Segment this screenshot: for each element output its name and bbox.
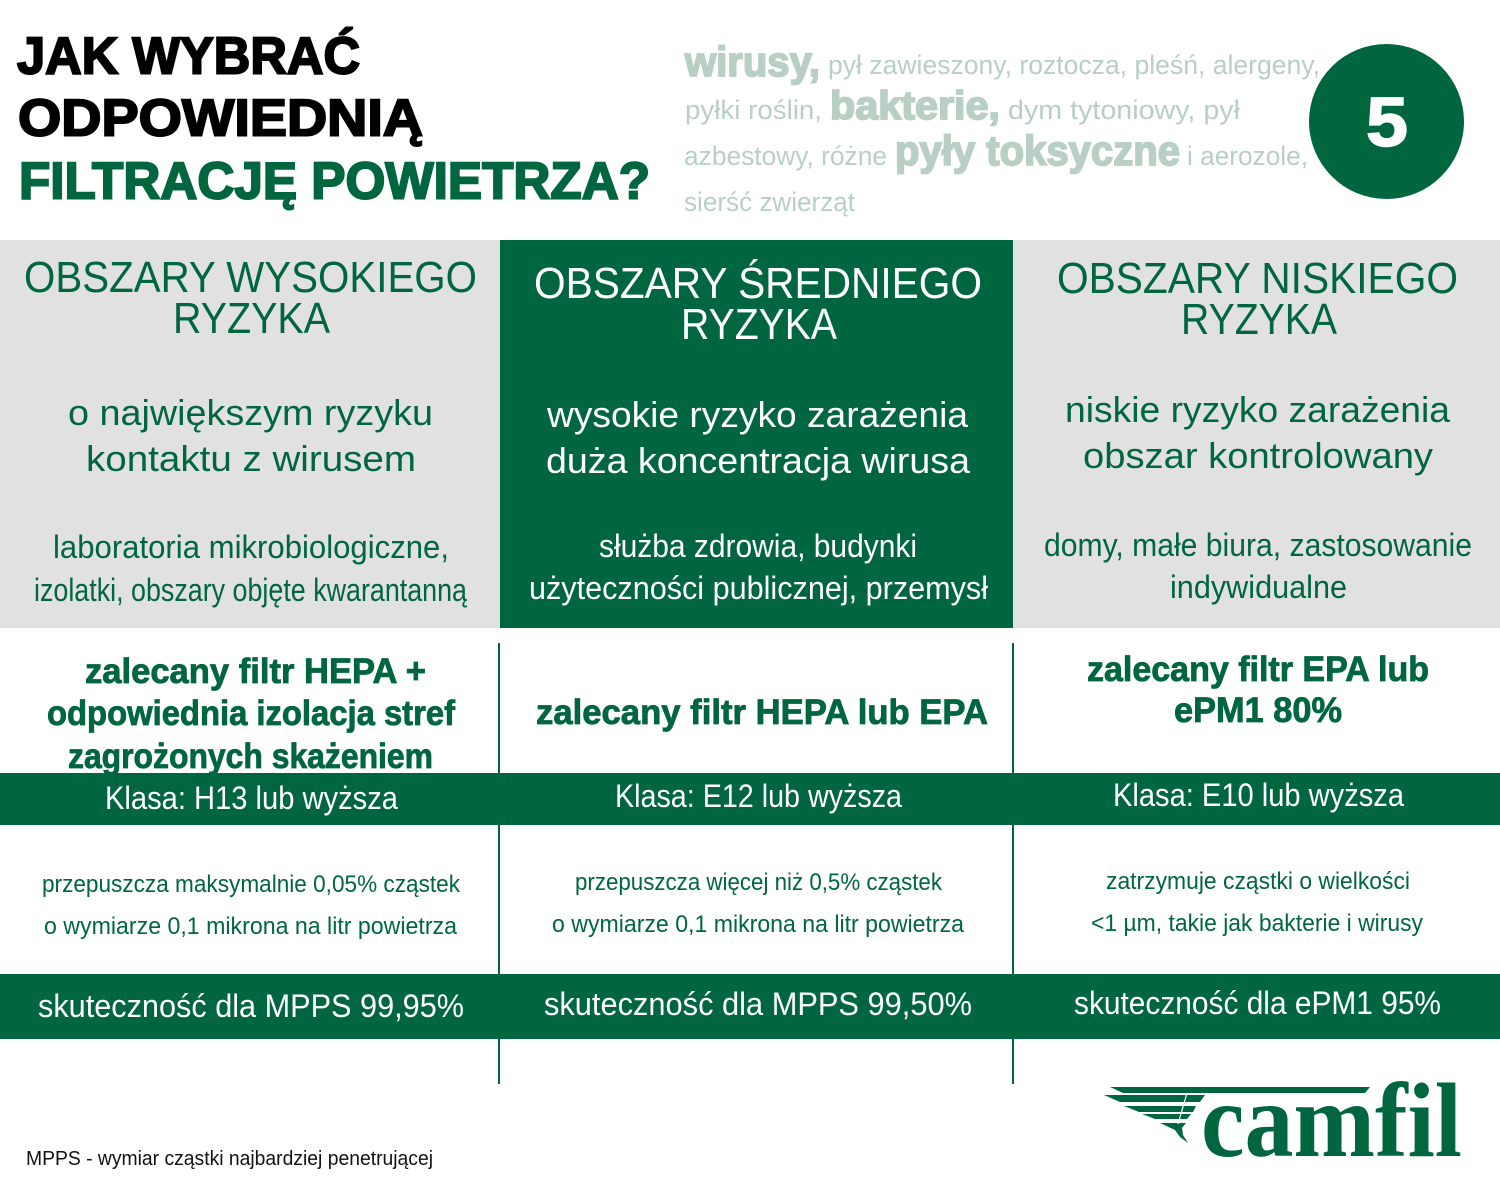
panel: medium risk column: OBSZARY ŚREDNIEGO: [534, 257, 982, 308]
word cloud of pollutants: wirusy,: [684, 38, 820, 85]
number badge 5: 5: [1366, 83, 1408, 161]
panel: medium risk column: służba zdrowia, budynki: [599, 528, 917, 564]
word cloud of pollutants: sierść zwierząt: [684, 187, 855, 217]
panel: medium risk column: RYZYKA: [681, 300, 838, 349]
panel: low risk column: indywidualne: [1170, 569, 1347, 605]
panel: low risk column: Klasa: E10 lub wyższa: [1113, 777, 1404, 813]
word cloud of pollutants: i aerozole,: [1187, 141, 1308, 171]
word cloud of pollutants: [684, 38, 1320, 217]
panel: high risk column: kontaktu z wirusem: [86, 438, 416, 479]
panel: high risk column: przepuszcza maksymalnie 0,05% cząstek: [42, 871, 461, 898]
panel: high risk column: zagrożonych skażeniem: [68, 737, 433, 776]
panel: column backgrounds: [0, 240, 1500, 628]
panel: high risk column: o wymiarze 0,1 mikrona na litr powietrza: [44, 913, 458, 940]
title: [17, 28, 650, 210]
panel: high risk column: [24, 253, 477, 1024]
panel: high risk column: RYZYKA: [173, 294, 331, 343]
word cloud of pollutants: pyłki roślin,: [685, 95, 822, 125]
word cloud of pollutants: pyły toksyczne: [895, 127, 1180, 174]
footnote: MPPS - wymiar cząstki najbardziej penetrującej: [26, 1148, 433, 1170]
title: JAK WYBRAĆ: [17, 28, 360, 86]
panel: medium risk column: [529, 257, 988, 1022]
panel: high risk column: izolatki, obszary objęte kwarantanną: [34, 572, 467, 608]
panel: medium risk column: Klasa: E12 lub wyższa: [615, 778, 902, 814]
panel: high risk column: odpowiednia izolacja stref: [47, 694, 455, 733]
word cloud of pollutants: azbestowy, różne: [684, 141, 887, 171]
panel: low risk column: niskie ryzyko zarażenia: [1065, 389, 1451, 430]
panel: high risk column: Klasa: H13 lub wyższa: [105, 780, 398, 816]
panel: high risk column: OBSZARY WYSOKIEGO: [24, 253, 477, 302]
panel: low risk column: skuteczność dla ePM1 95%: [1074, 985, 1441, 1021]
panel: low risk column: obszar kontrolowany: [1083, 435, 1433, 476]
panel: medium risk column: użyteczności publicznej, przemysł: [529, 570, 988, 606]
title: FILTRACJĘ POWIETRZA?: [19, 152, 650, 210]
word cloud of pollutants: bakterie,: [830, 84, 1000, 128]
panel: low risk column: [1044, 254, 1472, 1021]
band: efficiency: [0, 974, 1500, 1039]
panel: medium risk column: zalecany filtr HEPA lub EPA: [536, 693, 988, 732]
panel: low risk column: OBSZARY NISKIEGO: [1057, 254, 1458, 303]
panel: low risk column: ePM1 80%: [1174, 691, 1342, 730]
logo: camfil: camfil: [1201, 1062, 1462, 1179]
panel: high risk column: skuteczność dla MPPS 99,95%: [38, 988, 464, 1024]
panel: low risk column: zalecany filtr EPA lub: [1087, 650, 1429, 689]
panel: medium risk column: skuteczność dla MPPS 99,50%: [544, 986, 972, 1022]
word cloud of pollutants: pył zawieszony, roztocza, pleśń, alergeny,: [828, 50, 1320, 80]
panel: high risk column: o największym ryzyku: [68, 392, 433, 433]
word cloud of pollutants: dym tytoniowy, pył: [1008, 95, 1240, 125]
panel: low risk column: RYZYKA: [1181, 295, 1338, 344]
panel: medium risk column: o wymiarze 0,1 mikrona na litr powietrza: [552, 911, 965, 938]
band: filter class: [0, 773, 1500, 825]
panel: medium risk column: wysokie ryzyko zarażenia: [546, 394, 969, 435]
panel: low risk column: domy, małe biura, zastosowanie: [1044, 527, 1472, 563]
panel: high risk column: laboratoria mikrobiologiczne,: [53, 529, 449, 565]
number badge 5: [1309, 44, 1464, 199]
panel: low risk column: <1 µm, takie jak bakterie i wirusy: [1091, 910, 1423, 937]
logo: camfil: [1104, 1062, 1462, 1179]
panel: low risk column: zatrzymuje cząstki o wielkości: [1106, 868, 1410, 895]
title: ODPOWIEDNIĄ: [18, 90, 423, 148]
panel: medium risk column: przepuszcza więcej niż 0,5% cząstek: [575, 869, 943, 896]
panel: high risk column: zalecany filtr HEPA +: [85, 652, 426, 691]
panel: medium risk column: duża koncentracja wirusa: [546, 440, 971, 481]
